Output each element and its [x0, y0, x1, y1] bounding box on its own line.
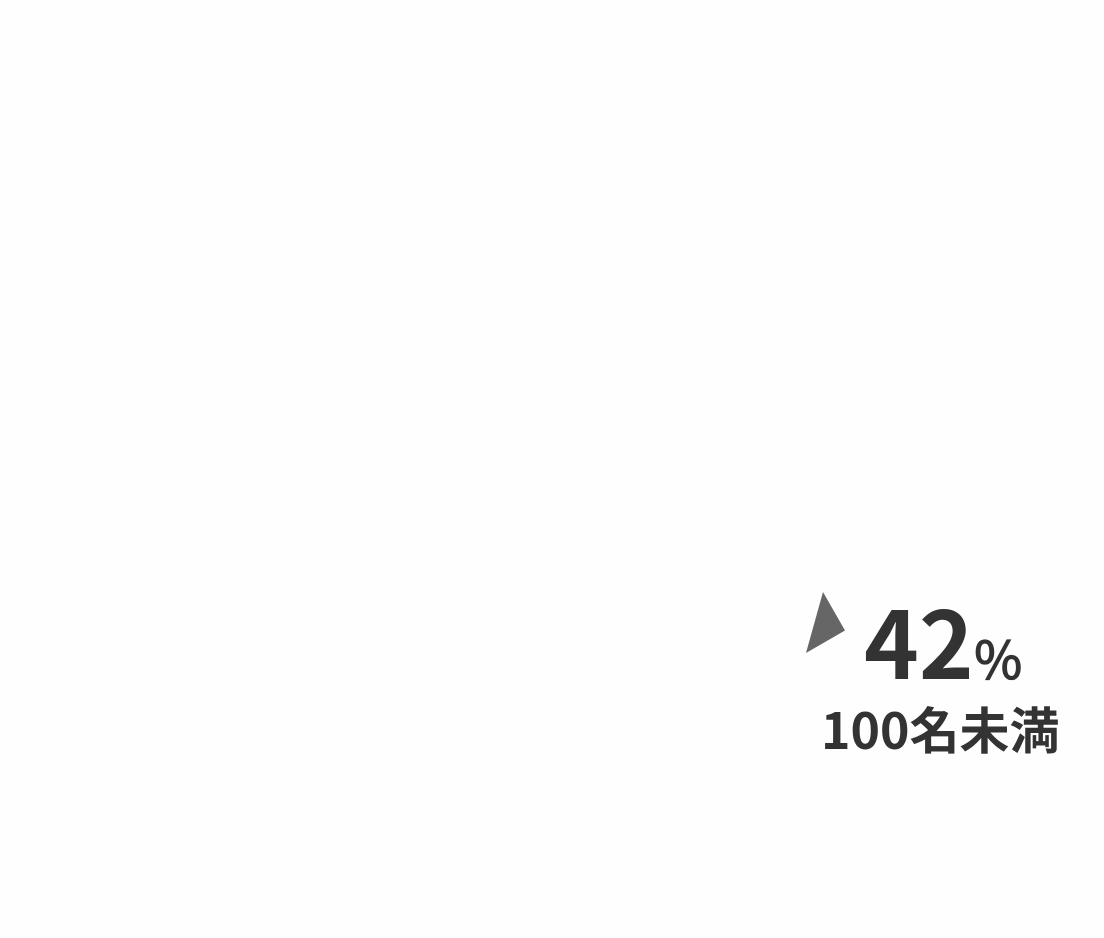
label: under 100: 100名未満	[821, 692, 1060, 764]
pie slice wedge icon	[806, 592, 845, 653]
value: 42%: 42%	[864, 571, 1022, 706]
statistic: 42 percent, under 100 employees	[821, 571, 1060, 764]
